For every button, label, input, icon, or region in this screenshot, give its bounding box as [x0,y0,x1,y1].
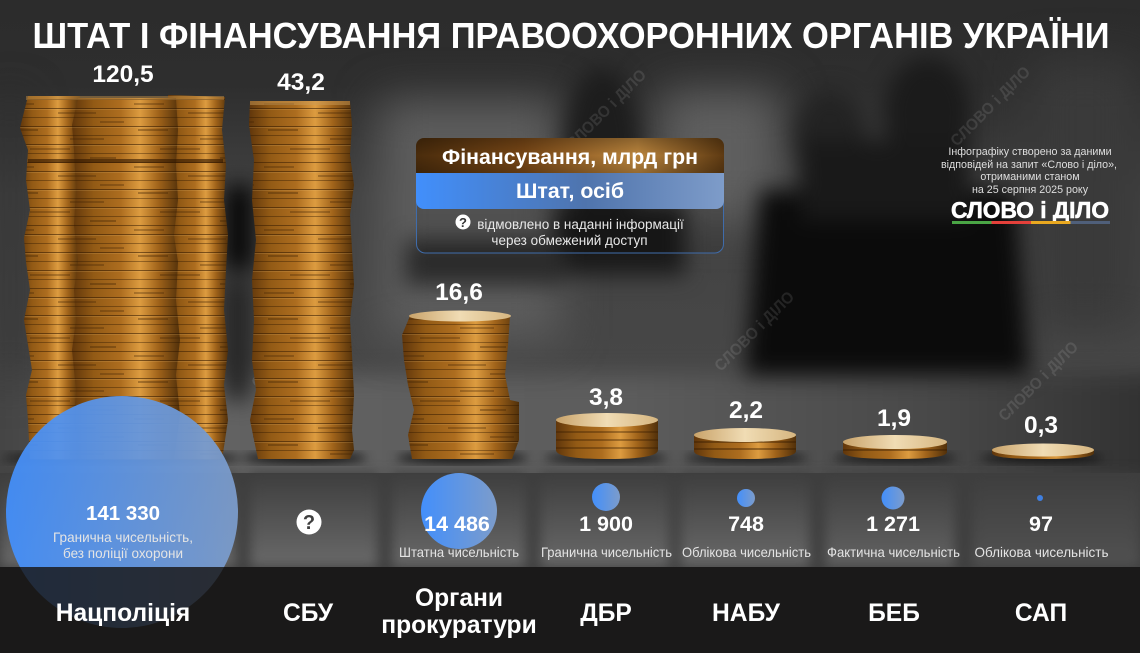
staff: Нацполіція: Гранична чисельність, [53,529,193,545]
source note: на 25 серпня 2025 року [972,184,1089,196]
watermarks: СЛОВО і ДІЛО [996,339,1082,425]
staff: НАБУ: Облікова чисельність [682,544,811,560]
legend: staff key [416,173,724,209]
funding values [92,61,1058,439]
legend: refused note text: ? [459,215,467,230]
bubble: БЕБ staff [882,486,904,510]
staff: БЕБ [827,512,960,560]
source note: відповідей на запит «Слово і діло», [941,159,1117,171]
icon: question mark СБУ: ? [303,512,315,534]
staff: БЕБ: Фактична чисельність [827,544,960,560]
coin shadows [2,453,1104,463]
staff: САП: 97 [1029,512,1053,536]
staff: НАБУ: 748 [728,512,764,536]
bubble: Органи прокуратури staff [421,473,497,549]
agency names: ДБР [580,600,632,627]
source note: отриманими станом [980,171,1080,183]
bubble: НАБУ staff [737,489,755,507]
source note: Інфографіку створено за даними [948,146,1112,158]
staff: ДБР: 1 900 [579,512,633,536]
agency names: БЕБ [868,600,920,627]
title: ШТАТ І ФІНАНСУВАННЯ ПРАВООХОРОННИХ ОРГАНІВ УКРАЇНИ [32,15,1110,56]
coin stack: Органи прокуратури [402,310,519,459]
watermarks: СЛОВО і ДІЛО [564,67,650,153]
legend: funding key: Фінансування, млрд грн [442,145,698,169]
watermarks: СЛОВО і ДІЛО [712,289,798,375]
source note [941,146,1117,196]
staff: Органи прокуратури: Штатна чисельність [399,544,519,560]
legend: refused note text: відмовлено в наданні інформації [477,217,684,232]
coin stack: САП [992,444,1094,459]
funding values: 120,5 [92,61,154,88]
funding values: 3,8 [589,384,623,411]
bubble: САП staff [1037,495,1043,501]
legend [416,138,724,253]
agency names: прокуратури [381,612,537,639]
staff band columns [0,473,1140,567]
bottom band overlay [0,567,1140,653]
funding values: 43,2 [277,69,325,96]
staff: Органи прокуратури: 14 486 [424,512,490,536]
bubble: ДБР staff [592,483,620,511]
icon: question mark СБУ [296,510,322,534]
staff: САП: Облікова чисельність [974,544,1108,560]
funding values: 1,9 [877,405,911,432]
staff: Органи прокуратури [399,512,519,560]
legend: staff key: Штат, осіб [516,179,624,203]
bottom band base [0,567,1140,653]
agency names [56,585,1067,639]
staff: САП [974,512,1108,560]
agency names: СБУ [283,600,334,627]
bubble: Нацполіція staff [6,396,238,628]
staff: ДБР [541,512,672,560]
funding values: 2,2 [729,397,763,424]
agency names: САП [1015,600,1067,627]
staff: ДБР: Гранична чисельність [541,544,672,560]
coin stack: Нацполіція [20,95,228,460]
coin stack: БЕБ [843,435,947,459]
coin stack: ДБР [556,413,658,459]
coin stack: СБУ [249,101,354,459]
legend: funding key [416,138,724,173]
staff: НАБУ [682,512,811,560]
staff: Нацполіція [53,502,193,561]
funding values: 16,6 [435,279,483,306]
agency names: Органи [415,585,503,612]
watermarks: СЛОВО і ДІЛО [249,306,335,392]
staff: Нацполіція: без поліції охорони [63,545,183,561]
agency names: НАБУ [712,600,781,627]
funding values: 0,3 [1024,412,1058,439]
legend: refused note text [456,214,684,248]
agency names: Нацполіція [56,600,190,627]
legend: refused note text: через обмежений доступ [491,233,648,248]
logo: СЛОВО і ДІЛО [951,197,1109,223]
watermarks: СЛОВО і ДІЛО [948,64,1034,150]
legend: refused note box [416,195,724,253]
staff: БЕБ: 1 271 [866,512,920,536]
coin stack: НАБУ [694,428,796,459]
watermarks [249,64,1082,425]
staff: Нацполіція: 141 330 [86,502,160,525]
